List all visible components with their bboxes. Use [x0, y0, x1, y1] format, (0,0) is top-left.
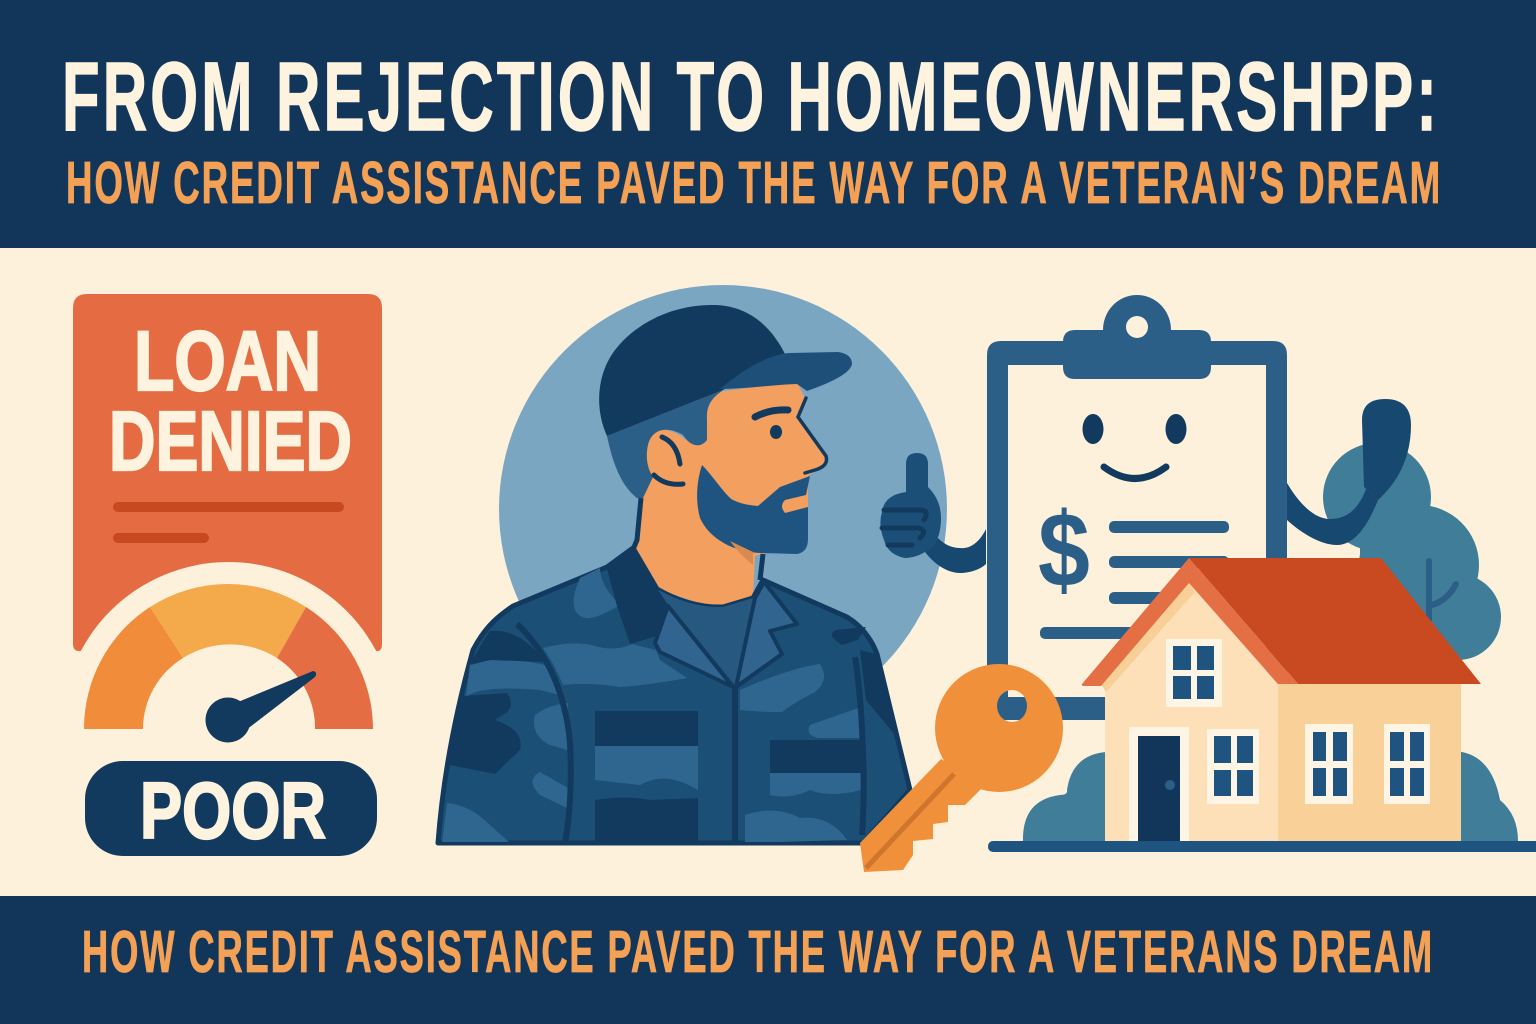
clipboard clip: [1063, 295, 1211, 379]
dark camouflage patches: [450, 627, 895, 843]
ground line: [988, 841, 1536, 852]
neck and face: [635, 382, 827, 606]
front door: [1129, 727, 1189, 841]
eye: [770, 425, 782, 439]
gable trim: [1082, 558, 1298, 686]
panel: loan denied letter: [73, 294, 382, 651]
ear lines: [654, 437, 683, 484]
right lapel: [736, 582, 797, 687]
clipboard raised hand: [1362, 399, 1411, 500]
window right one: [1305, 724, 1353, 804]
jacket seams: [517, 624, 864, 843]
illustration: bushes: [1023, 752, 1518, 841]
tree trunk: [1429, 561, 1456, 620]
heading: loan denied: DENIED: [109, 394, 352, 488]
neck outline: [632, 498, 763, 580]
badge: poor: POOR: [140, 766, 326, 855]
illustration: house: [1082, 558, 1481, 841]
key groove: [866, 774, 954, 868]
face outline: [798, 398, 827, 473]
house left wall: [1105, 583, 1278, 841]
camouflage jacket: [438, 548, 910, 843]
clipboard eyes: [1082, 414, 1186, 444]
cap visor: [720, 352, 852, 391]
gable soffit: [1101, 583, 1195, 692]
neck shadow: [730, 541, 753, 565]
collar: [607, 548, 668, 644]
house right wall: [1278, 684, 1461, 841]
footer band: [0, 896, 1536, 1024]
thumbs up hand: [880, 453, 941, 558]
key head with hole: [935, 664, 1063, 792]
clipboard smile: [1104, 467, 1166, 478]
blue circle behind soldier: [499, 285, 947, 733]
jacket bottom edge: [438, 842, 863, 844]
illustration: soldier: [438, 305, 910, 843]
illustration: tree: [1323, 443, 1501, 660]
camouflage patches: [442, 568, 861, 843]
dollar sign: $: [1038, 492, 1090, 609]
roof: [1189, 558, 1481, 684]
hair: [607, 390, 723, 498]
chest pockets: [595, 711, 865, 773]
heading: loan denied: [109, 314, 352, 488]
illustration: happy clipboard: [880, 295, 1411, 720]
clipboard right arm: [1287, 483, 1378, 545]
window right two: [1384, 724, 1430, 804]
clipboard text lines: [1040, 521, 1229, 639]
clipboard board: [987, 341, 1287, 720]
left lapel: [655, 606, 733, 687]
illustration: key: [860, 664, 1063, 872]
header band: [0, 0, 1536, 248]
attic window: [1166, 639, 1222, 707]
undershirt: [657, 589, 753, 687]
letter text lines: [113, 502, 344, 543]
beard: [697, 465, 810, 554]
heading: loan denied: LOAN: [134, 314, 321, 408]
gauge needle: [206, 671, 316, 742]
credit score gauge: [60, 562, 400, 896]
clipboard left arm: [925, 529, 986, 573]
cap crown: [599, 305, 785, 436]
window lower left: [1207, 729, 1259, 804]
eyebrow: [755, 410, 788, 417]
